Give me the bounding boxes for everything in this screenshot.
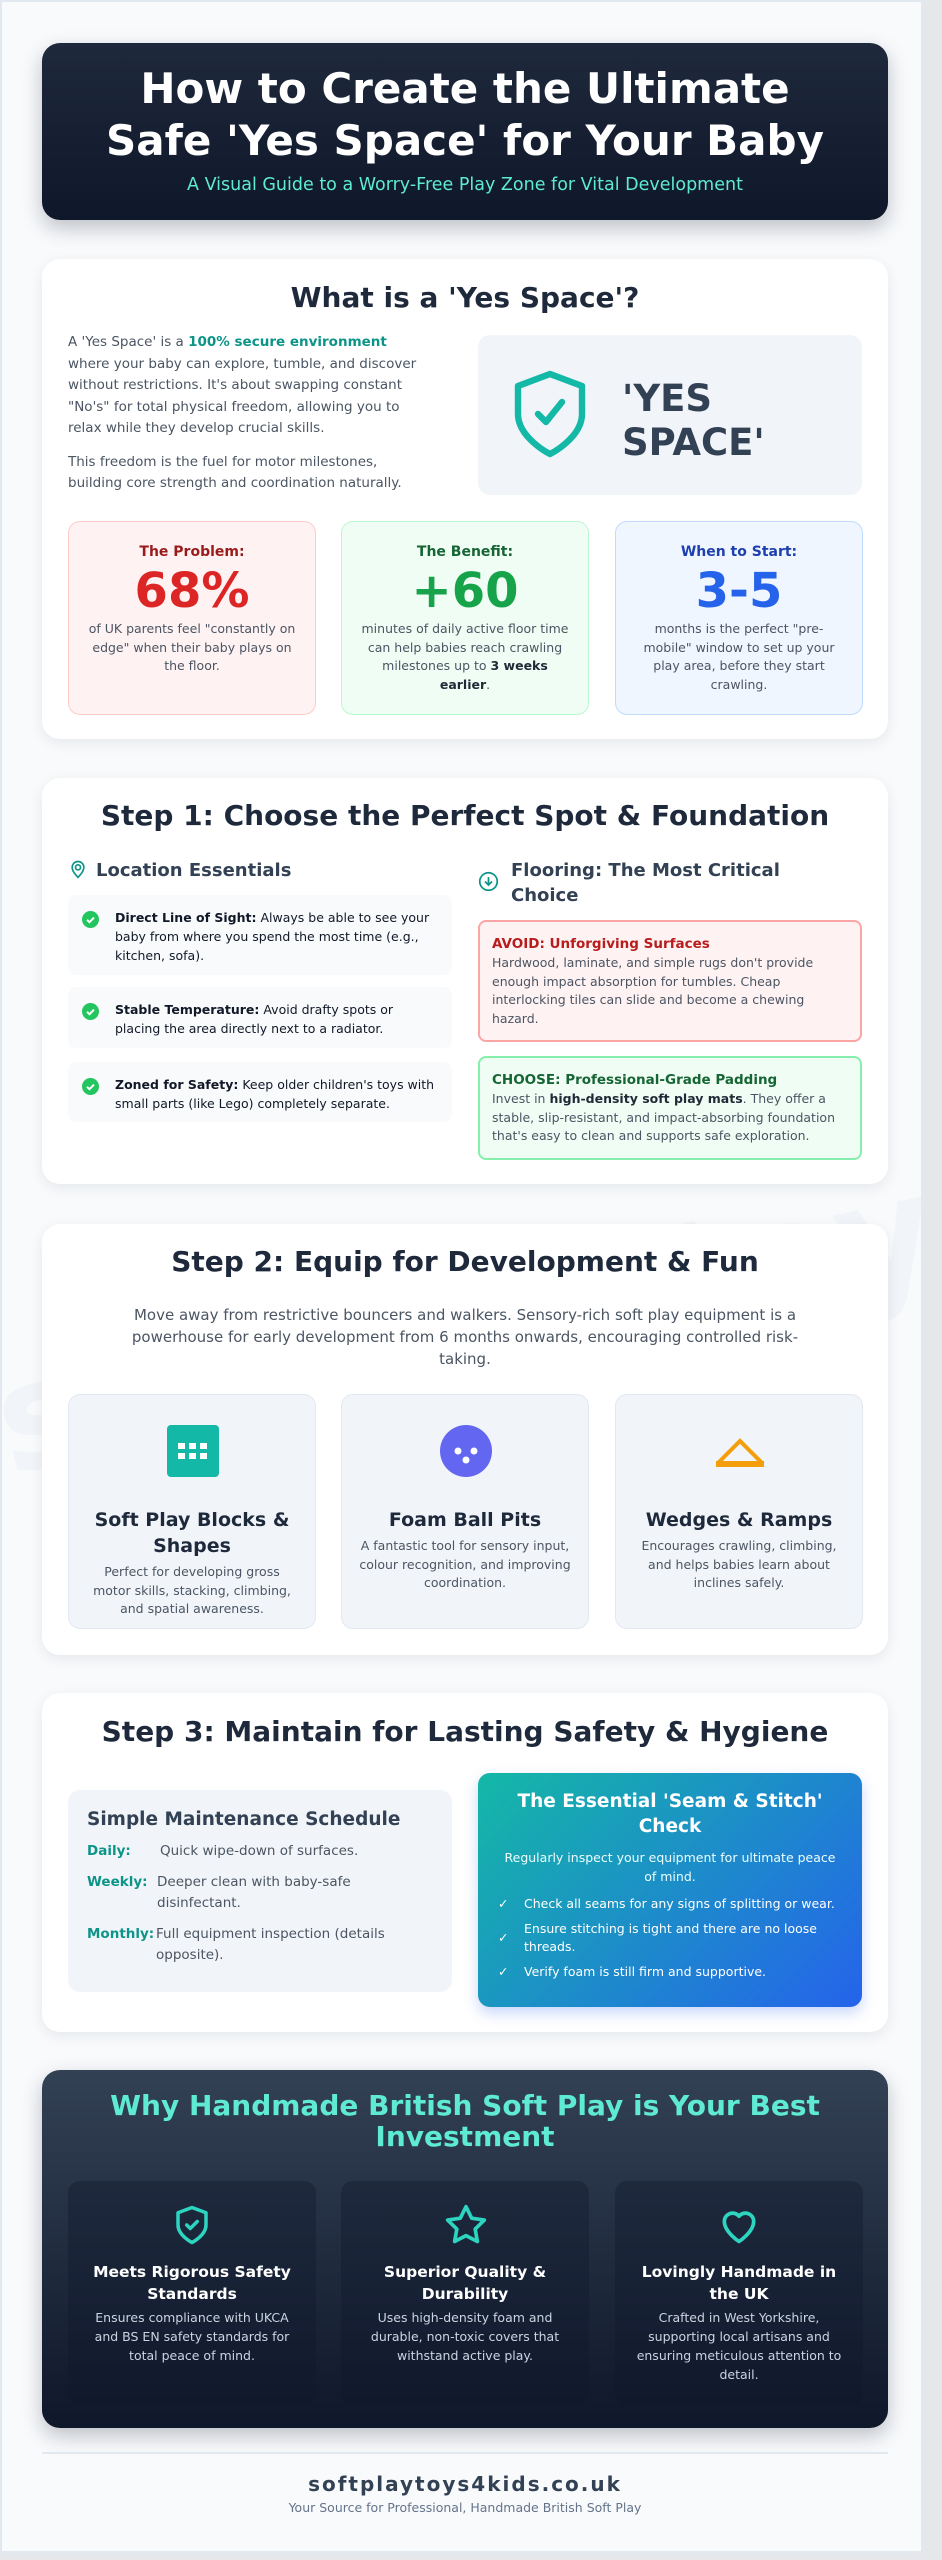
footer: Your Source for Professional, Handmade British Soft Play (289, 2500, 641, 2515)
yes space badge (478, 335, 862, 495)
card: blocks (68, 1394, 316, 1629)
item: zoned: Zoned for Safety: Keep older children's toys with small parts (like Lego) completely separate. (115, 1077, 434, 1111)
card: blocks: Perfect for developing gross motor skills, stacking, climbing, and spatial awareness. (93, 1564, 291, 1616)
card: handmade: Crafted in West Yorkshire, supporting local artisans and ensuring meticulous attention to detail. (637, 2310, 841, 2382)
title: Safe 'Yes Space' for Your Baby (106, 116, 824, 165)
stat: when to start: 3-5 (696, 563, 782, 619)
panel: why handmade british (42, 2070, 888, 2428)
seam & stitch check: ✓ (498, 1930, 508, 1945)
seam & stitch check: ✓ (498, 1896, 508, 1911)
callout: choose: CHOOSE: Professional-Grade Padding (492, 1072, 777, 1088)
card: quality: Superior Quality & Durability (384, 2263, 546, 2303)
intro text (68, 334, 416, 491)
callout: avoid (478, 920, 862, 1042)
panel: step 3 (42, 1693, 888, 2032)
heading (110, 2089, 820, 2153)
subheading: flooring: Flooring: The Most Critical Choice (511, 860, 780, 906)
icon: wedge (716, 1438, 764, 1467)
maintenance schedule (68, 1790, 452, 1992)
maintenance schedule: Quick wipe-down of surfaces. (160, 1843, 358, 1859)
maintenance schedule: Monthly: (87, 1926, 154, 1942)
stat: benefit (341, 521, 589, 715)
heading: Why Handmade British Soft Play is Your Best (110, 2089, 820, 2122)
badge text: SPACE' (622, 421, 765, 464)
maintenance schedule: Simple Maintenance Schedule (87, 1809, 400, 1830)
item: zoned (68, 1062, 452, 1122)
callout: choose (478, 1056, 862, 1160)
maintenance schedule: Full equipment inspection (details opposite). (156, 1926, 385, 1963)
badge text: 'YES (622, 377, 712, 420)
card: safety: Ensures compliance with UKCA and BS EN safety standards for total peace of mind. (95, 2310, 289, 2363)
panel: step 1 (42, 778, 888, 1184)
seam & stitch check: The Essential 'Seam & Stitch' Check (517, 1791, 823, 1837)
card: safety: Meets Rigorous Safety Standards (93, 2263, 291, 2303)
seam & stitch check: Verify foam is still firm and supportive. (524, 1964, 766, 1978)
panel: step 2 (42, 1224, 888, 1655)
callout: avoid: Hardwood, laminate, and simple rugs don't provide enough impact absorption for tumbles. Cheap interlocking tiles can slide and become a chewing hazard. (492, 955, 813, 1026)
heading: Investment (375, 2120, 555, 2153)
icon: blocks (167, 1425, 219, 1477)
panel: what is a yes space (42, 259, 888, 739)
badge text (622, 377, 765, 464)
card: blocks: Soft Play Blocks & Shapes (95, 1509, 289, 1557)
seam & stitch check: Check all seams for any signs of splitting or wear. (524, 1896, 835, 1911)
icon: star (446, 2204, 486, 2244)
heading: Step 2: Equip for Development & Fun (171, 1245, 759, 1278)
stat: benefit: The Benefit: (417, 544, 513, 560)
title (106, 64, 824, 165)
seam & stitch check: Regularly inspect your equipment for ultimate peace of mind. (505, 1850, 835, 1884)
seam & stitch check: ✓ (498, 1964, 508, 1978)
icon: shield check (514, 370, 586, 458)
stat: problem (68, 521, 316, 715)
intro text: A 'Yes Space' is a 100% secure environment where your baby can explore, tumble, and discover without restrictions. It's about swapping constant "No's" for total physical freedom, allowing you to relax while they develop crucial skills. (68, 334, 416, 436)
heading: Step 3: Maintain for Lasting Safety & Hygiene (102, 1715, 828, 1748)
stat: benefit: +60 (411, 563, 518, 619)
card: ball pits: Foam Ball Pits (389, 1509, 541, 1531)
stat: benefit: minutes of daily active floor time can help babies reach crawling milestones up to 3 weeks earlier. (362, 621, 568, 692)
footer: softplaytoys4kids.co.uk (308, 2472, 622, 2496)
card: handmade (615, 2181, 863, 2405)
card: ball pits: A fantastic tool for sensory input, colour recognition, and improving coordination. (359, 1538, 571, 1590)
subheading: location essentials: Location Essentials (96, 860, 291, 881)
stat: problem: of UK parents feel "constantly on edge" when their baby plays on the floor. (89, 621, 295, 673)
item: line of sight (68, 895, 452, 975)
card: handmade: Lovingly Handmade in the UK (642, 2263, 836, 2303)
stat: when to start: When to Start: (681, 544, 797, 560)
icon: heart (722, 2211, 756, 2244)
header banner (42, 43, 888, 220)
card: wedges: Wedges & Ramps (646, 1509, 832, 1531)
item: temperature (68, 987, 452, 1048)
subtitle: A Visual Guide to a Worry-Free Play Zone for Vital Development (187, 175, 743, 195)
seam & stitch check: Ensure stitching is tight and there are no loose threads. (524, 1920, 817, 1954)
stat: when to start: months is the perfect "pre-mobile" window to set up your play area, before they start crawling. (643, 621, 835, 692)
card: quality: Uses high-density foam and durable, non-toxic covers that withstand active play. (371, 2310, 559, 2363)
card: ball pits (341, 1394, 589, 1629)
intro text: Move away from restrictive bouncers and walkers. Sensory-rich soft play equipment is a powerhouse for early development from 6 months onwards, encouraging controlled risk-taking. (132, 1306, 798, 1368)
maintenance schedule: Deeper clean with baby-safe disinfectant. (157, 1874, 351, 1911)
callout: avoid: AVOID: Unforgiving Surfaces (492, 936, 710, 952)
icon: shield (176, 2206, 208, 2244)
stat: problem: 68% (135, 563, 249, 619)
heading: What is a 'Yes Space'? (291, 281, 639, 314)
card: wedges (615, 1394, 863, 1629)
callout: choose: Invest in high-density soft play mats. They offer a stable, slip-resistant, and impact-absorbing foundation that's easy to clean and supports safe exploration. (492, 1091, 835, 1143)
icon: ball (440, 1425, 492, 1477)
maintenance schedule: Daily: (87, 1843, 131, 1859)
heading: Step 1: Choose the Perfect Spot & Foundation (101, 799, 829, 832)
footer (288, 2472, 641, 2515)
card: wedges: Encourages crawling, climbing, and helps babies learn about inclines safely. (641, 1538, 837, 1590)
intro text: This freedom is the fuel for motor milestones, building core strength and coordination naturally. (68, 454, 402, 491)
stat: when to start (615, 521, 863, 715)
seam & stitch check (478, 1773, 862, 2007)
card: quality (341, 2181, 589, 2405)
title: How to Create the Ultimate (140, 64, 790, 113)
maintenance schedule: Weekly: (87, 1874, 148, 1890)
card: safety (68, 2181, 316, 2405)
item: line of sight: Direct Line of Sight: Always be able to see your baby from where you spend the most time (e.g., kitchen, sofa). (115, 910, 429, 963)
stat: problem: The Problem: (139, 544, 245, 560)
item: temperature: Stable Temperature: Avoid drafty spots or placing the area directly next to a radiator. (115, 1002, 393, 1036)
